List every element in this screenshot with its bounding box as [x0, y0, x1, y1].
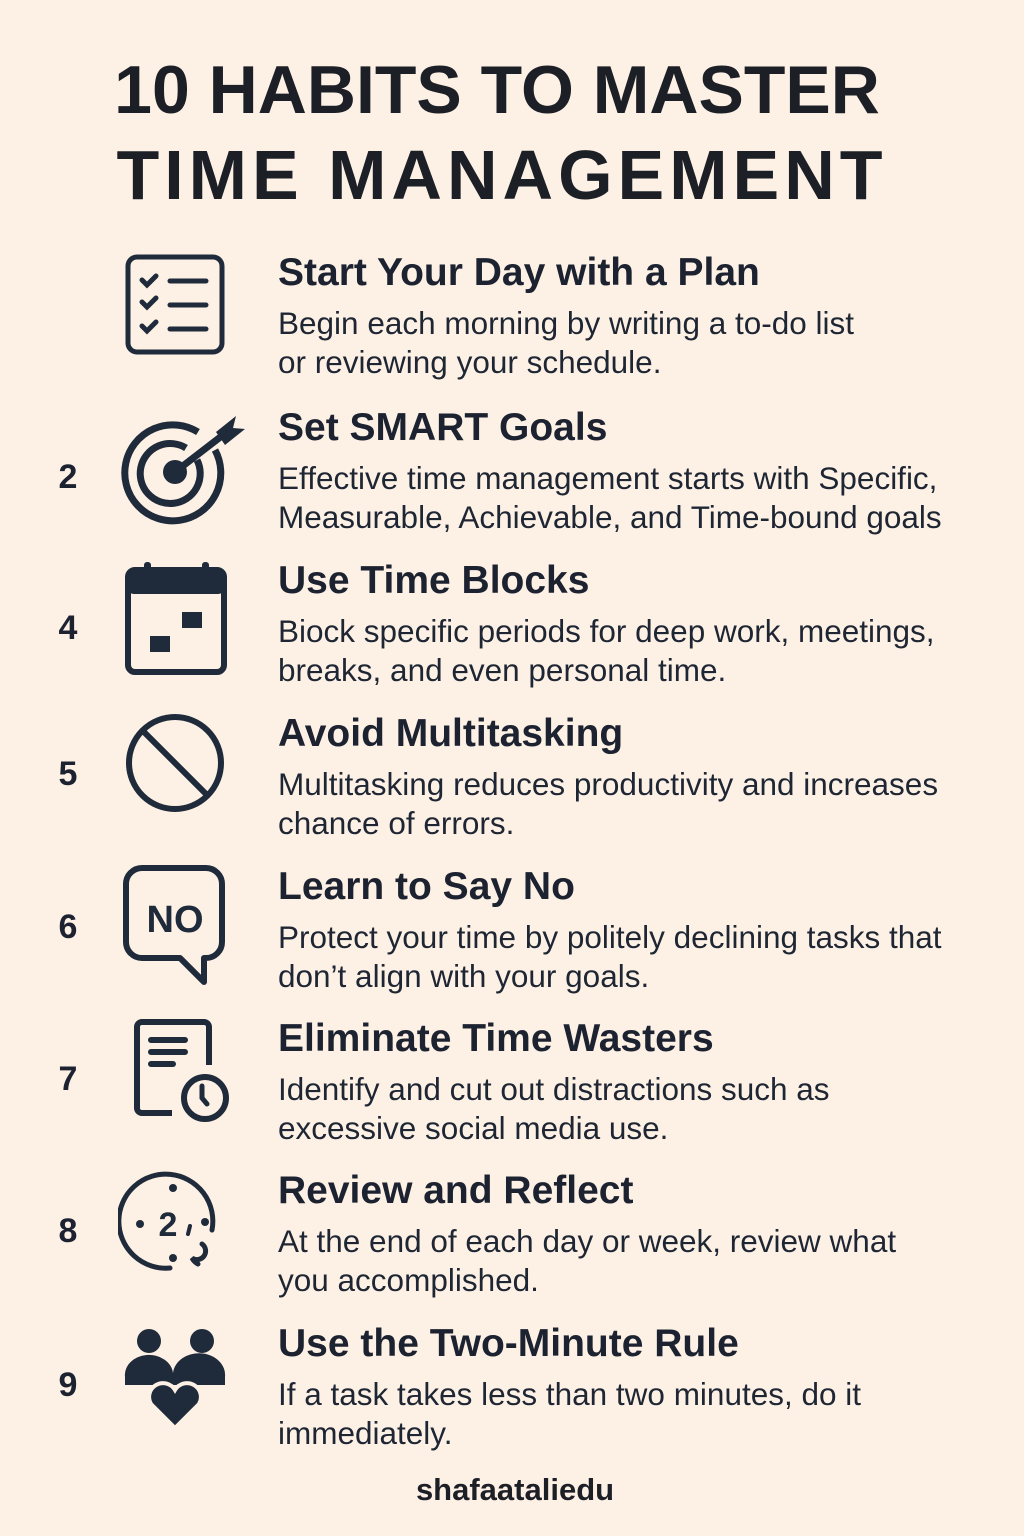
item 1 — [278, 251, 854, 380]
item 8 — [278, 1322, 861, 1451]
item 5 — [278, 865, 942, 994]
item 3: breaks, and even personal time. — [278, 652, 726, 688]
item 1: Begin each morning by writing a to-do list — [278, 305, 854, 341]
icon: calendar — [125, 562, 227, 675]
number 8: 8 — [59, 1212, 77, 1250]
number 7: 7 — [59, 1060, 77, 1098]
title — [114, 52, 888, 214]
item 7: you accomplished. — [278, 1262, 539, 1298]
item 7: Review and Reflect — [278, 1169, 633, 1212]
icon: prohibit — [126, 714, 224, 812]
item 6: excessive social media use. — [278, 1110, 668, 1146]
item 2: Effective time management starts with Specific, — [278, 460, 937, 496]
item 5: Protect your time by politely declining tasks that — [278, 919, 942, 955]
number 4: 4 — [59, 609, 77, 647]
number 2: 2 — [59, 458, 77, 496]
icon: review clock — [118, 1172, 216, 1271]
item 5: don’t align with your goals. — [278, 958, 649, 994]
item 7 — [278, 1169, 896, 1298]
icon: NO speech bubble: NO — [146, 899, 204, 941]
item 5: Learn to Say No — [278, 865, 575, 908]
item 4 — [278, 712, 938, 841]
item 6: Eliminate Time Wasters — [278, 1017, 714, 1060]
item 2: Set SMART Goals — [278, 406, 607, 449]
icon: document with clock — [134, 1019, 229, 1122]
number 6: 6 — [59, 908, 77, 946]
item 3: Biock specific periods for deep work, meetings, — [278, 613, 935, 649]
item 1: or reviewing your schedule. — [278, 344, 661, 380]
item 6 — [278, 1017, 830, 1146]
icon: people with heart — [124, 1329, 226, 1426]
item 8: Use the Two-Minute Rule — [278, 1322, 739, 1365]
icon: review clock: 2 — [159, 1206, 177, 1244]
item 2 — [278, 406, 942, 535]
number 5: 5 — [59, 755, 77, 793]
item 3: Use Time Blocks — [278, 559, 589, 602]
icon: target — [121, 416, 245, 524]
item 6: Identify and cut out distractions such as — [278, 1071, 830, 1107]
item 4: Avoid Multitasking — [278, 712, 623, 755]
footer credit: shafaataliedu — [416, 1472, 614, 1507]
item 1: Start Your Day with a Plan — [278, 251, 760, 294]
item 3 — [278, 559, 935, 688]
item 7: At the end of each day or week, review what — [278, 1223, 896, 1259]
number 9: 9 — [59, 1366, 77, 1404]
item 4: chance of errors. — [278, 805, 514, 841]
icon: checklist — [126, 254, 224, 354]
title: TIME MANAGEMENT — [116, 136, 888, 214]
title: 10 HABITS TO MASTER — [114, 52, 880, 128]
icon: NO speech bubble — [123, 865, 225, 985]
item 4: Multitasking reduces productivity and increases — [278, 766, 938, 802]
item 2: Measurable, Achievable, and Time-bound goals — [278, 499, 942, 535]
item 8: immediately. — [278, 1415, 452, 1451]
item 8: If a task takes less than two minutes, do it — [278, 1376, 861, 1412]
